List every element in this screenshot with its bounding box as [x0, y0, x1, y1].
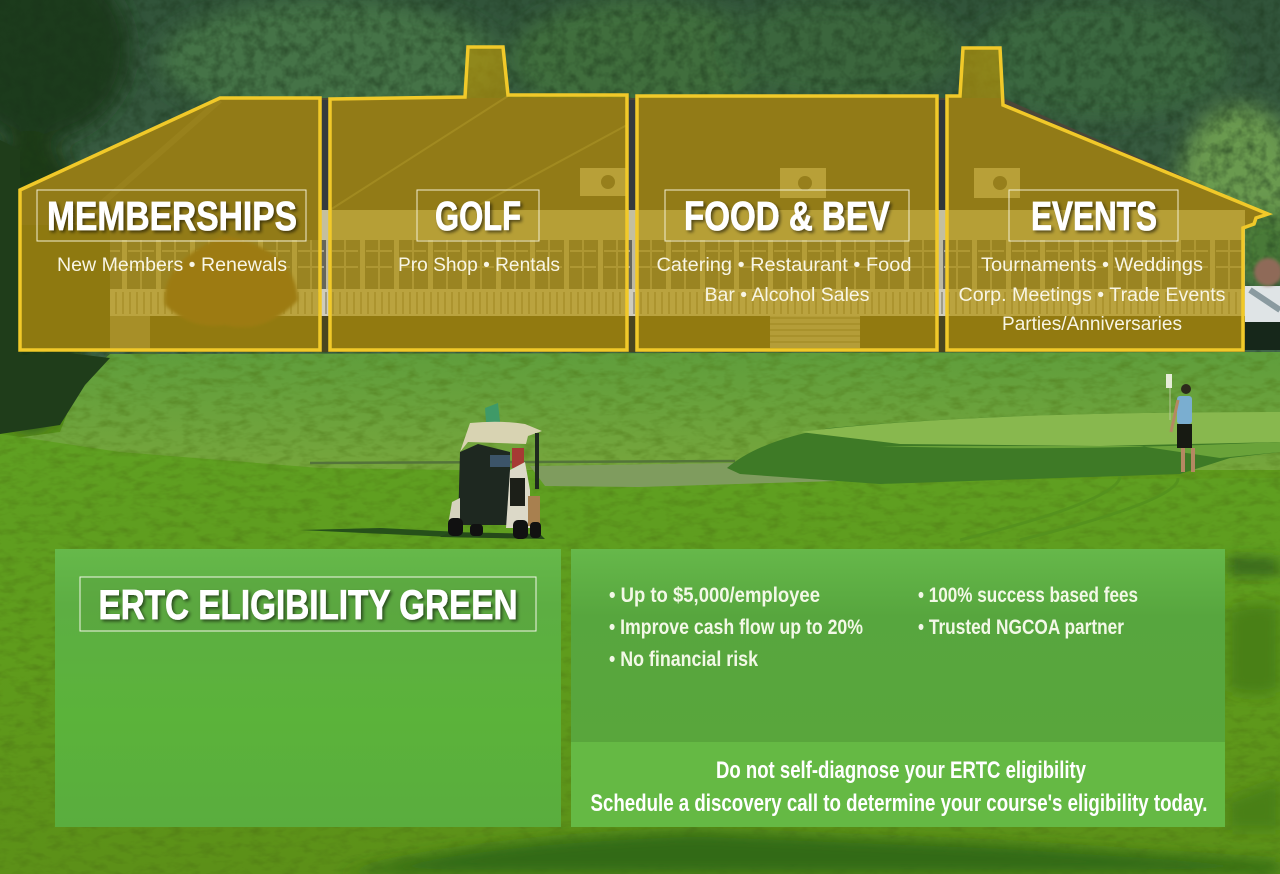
heading: memberships: MEMBERSHIPS: [47, 193, 297, 239]
golfer with flag: [1166, 374, 1195, 472]
background: dark tree at left edge: [0, 140, 110, 434]
list: benefits: • Trusted NGCOA partner: [918, 616, 1124, 639]
list: benefits: • Up to $5,000/employee: [609, 584, 820, 607]
heading: events: EVENTS: [1031, 193, 1157, 239]
background: mower tracks: [960, 476, 1178, 540]
text: events items: Corp. Meetings • Trade Events: [958, 285, 1226, 306]
background: shadows on fairway: [340, 558, 1280, 874]
callout: schedule a discovery call: Do not self-diagnose your ERTC eligibility: [716, 757, 1087, 784]
callout: schedule a discovery call: [571, 742, 1225, 827]
autumn tree: [165, 235, 298, 327]
text: events items: Tournaments • Weddings: [981, 255, 1203, 276]
background: lower fairway: [0, 434, 1280, 874]
background: raised green: [727, 412, 1280, 484]
background: upper fairway: [0, 352, 1280, 470]
panel: ERTC benefits: [571, 549, 1225, 742]
list: benefits: • 100% success based fees: [918, 584, 1138, 607]
list: benefits: [609, 584, 1138, 671]
panel: ERTC eligibility green: [55, 549, 561, 827]
wing at right with railing: [1245, 286, 1280, 324]
panel: food and beverage: [637, 96, 937, 350]
text: events items: Parties/Anniversaries: [1002, 314, 1182, 335]
list: benefits: • Improve cash flow up to 20%: [609, 616, 863, 639]
background: clubhouse building: [20, 96, 1280, 352]
text: golf items: Pro Shop • Rentals: [398, 255, 560, 276]
background: tree line: [0, 0, 1280, 430]
golf cart: [300, 403, 545, 539]
panel: golf: [330, 47, 627, 350]
text: memberships items: New Members • Renewals: [57, 255, 287, 276]
panel: events: [947, 48, 1268, 350]
heading: golf: GOLF: [435, 193, 521, 239]
heading: ERTC eligibility green: ERTC ELIGIBILITY GREEN: [98, 581, 518, 628]
dormers: [580, 168, 1020, 198]
facade: [320, 210, 1245, 242]
heading: food and bev: FOOD & BEV: [684, 193, 891, 239]
list: benefits: • No financial risk: [609, 648, 758, 671]
text: food and bev items: Catering • Restaurant • Food: [656, 255, 912, 276]
roof ridge lines: [330, 96, 627, 210]
panel: memberships: [20, 98, 320, 350]
text: food and bev items: Bar • Alcohol Sales: [704, 285, 870, 306]
steps: [770, 316, 860, 348]
background: pond: [530, 463, 870, 487]
text: food and bev items: [656, 255, 912, 306]
text: events items: [958, 255, 1226, 335]
